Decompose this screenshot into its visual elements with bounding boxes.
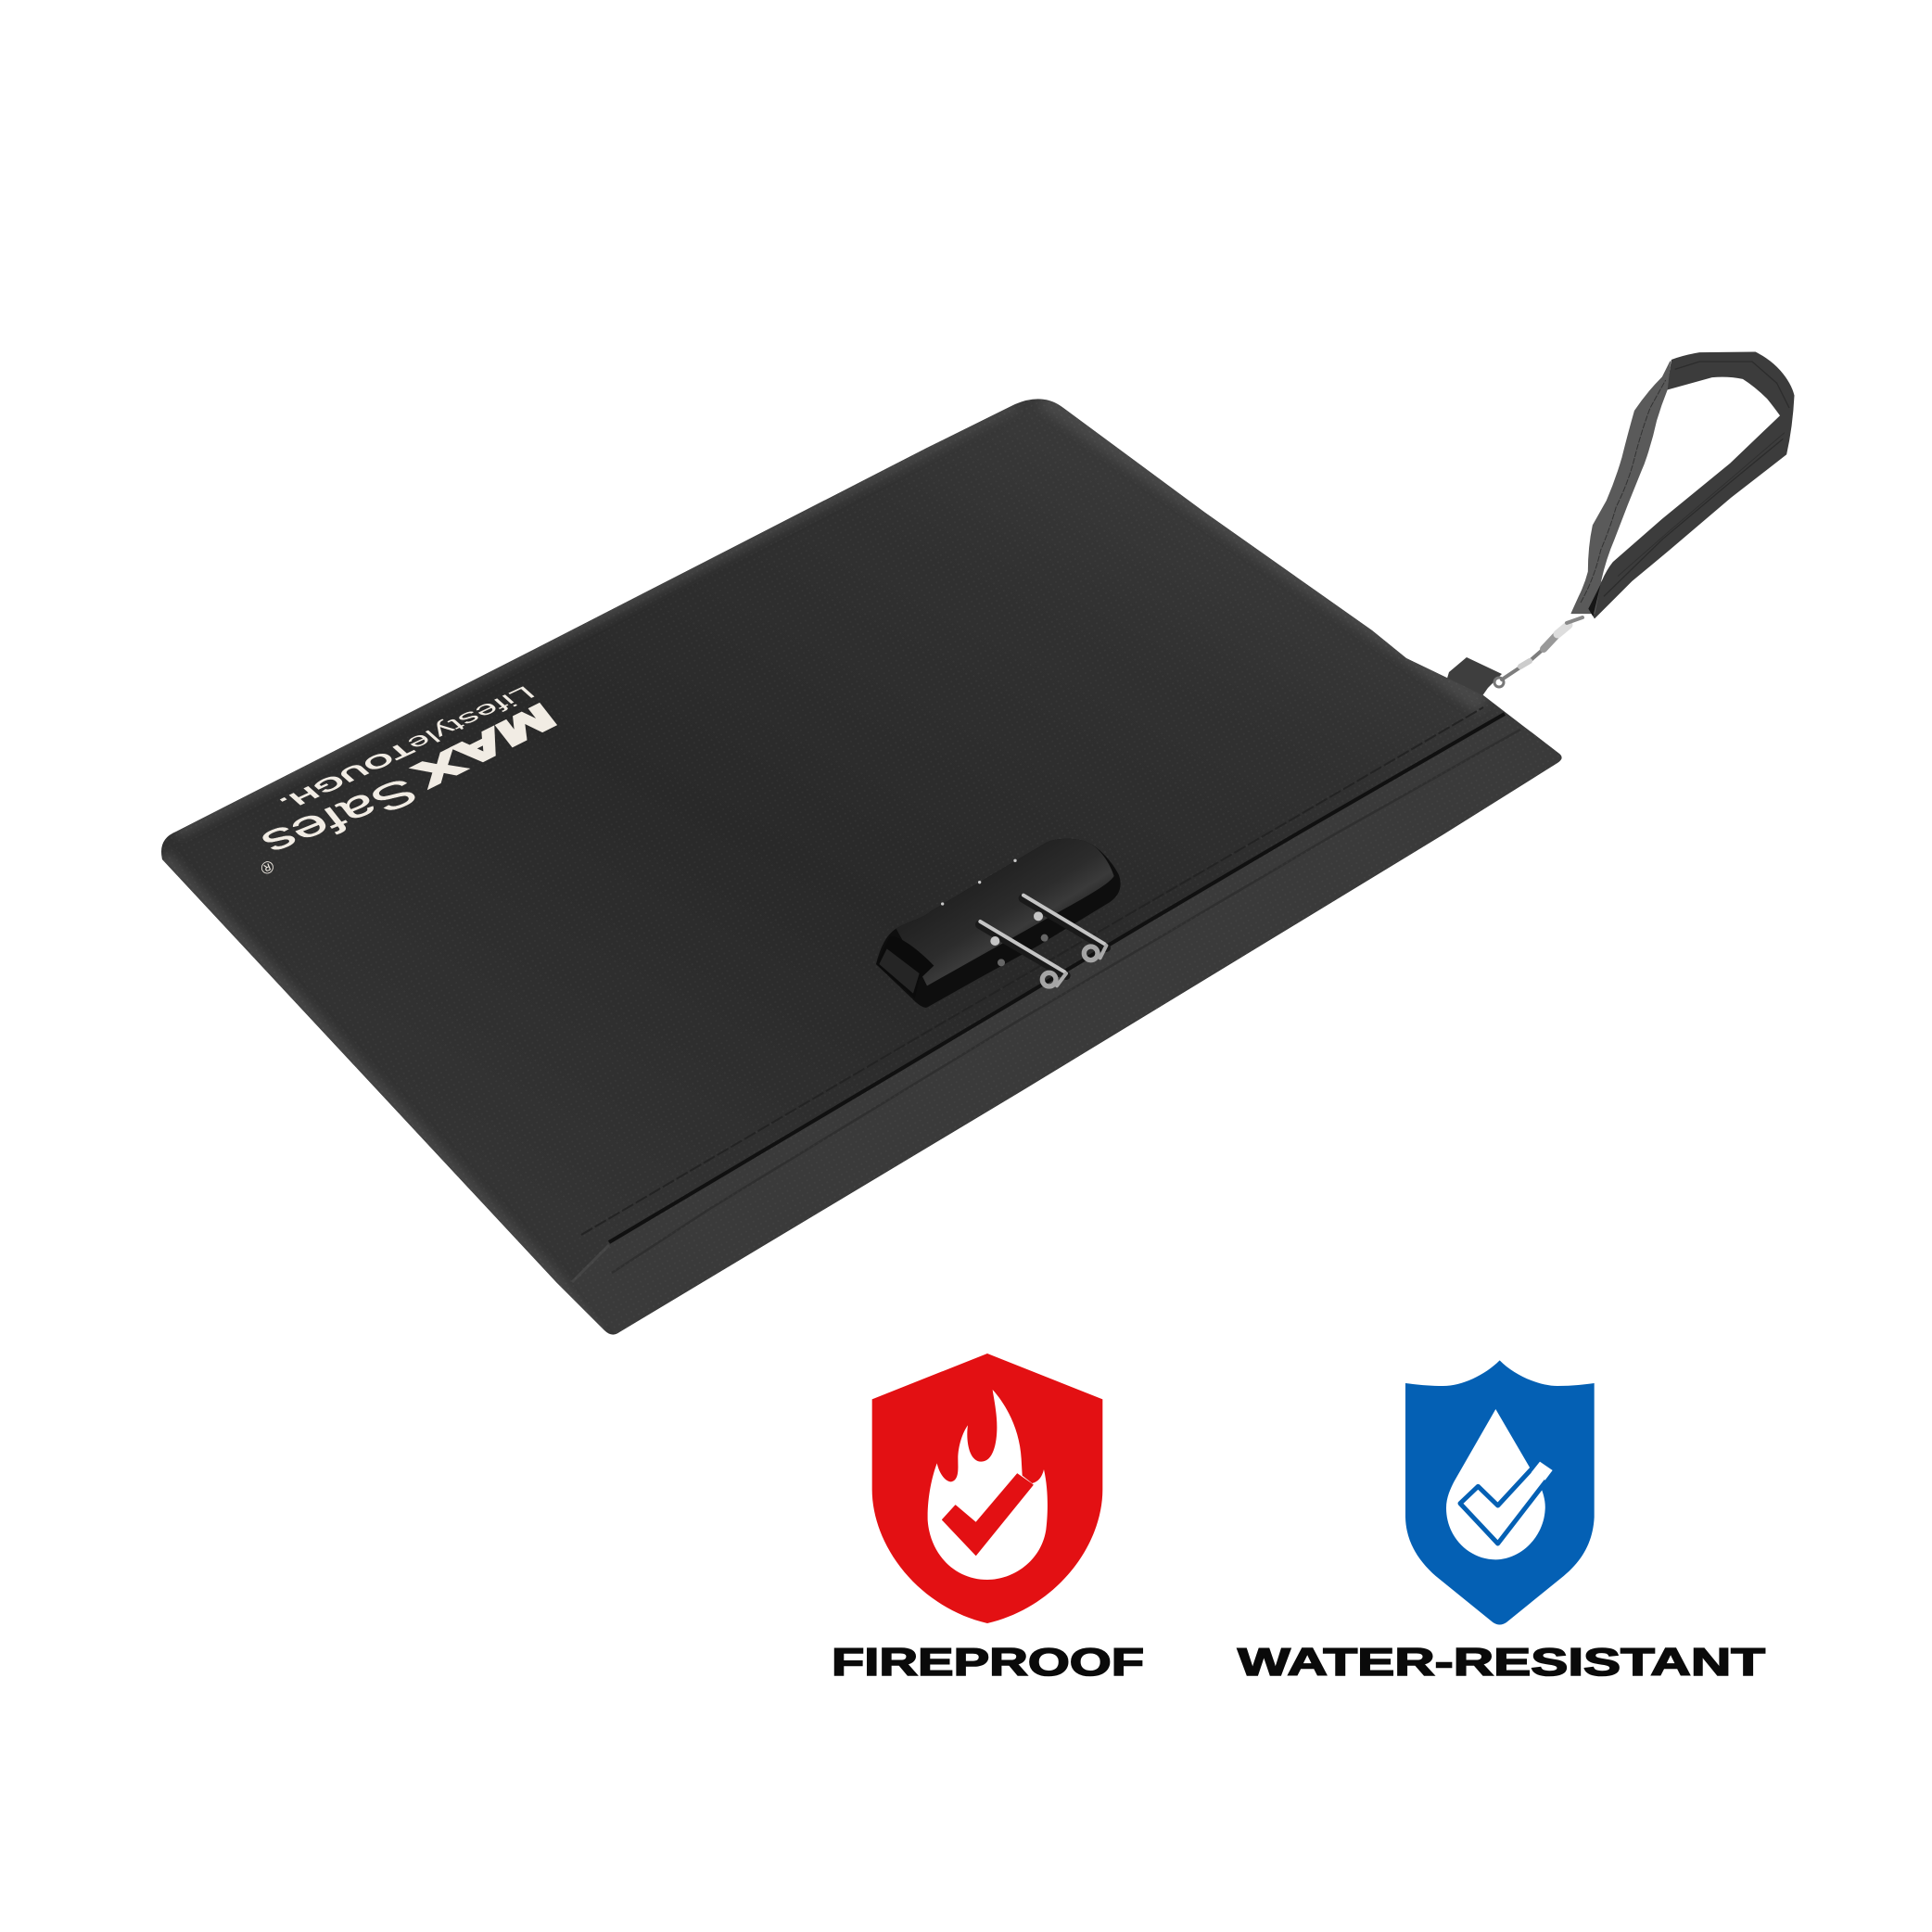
icon: combination lock (876, 839, 1121, 1008)
lock base (876, 839, 1121, 1008)
icon: water-resistant shield (1405, 1360, 1595, 1624)
flame (928, 1390, 1048, 1580)
texture (139, 371, 1585, 1354)
icon: zipper pull tab (1446, 657, 1502, 697)
label: water-resistant: WATER-RESISTANT (1238, 1640, 1765, 1684)
brand logo: LifestyleTOUGH. (273, 682, 540, 814)
brand logo: MAX (407, 696, 563, 794)
panel: document bag (139, 371, 1585, 1354)
bag body (161, 399, 1562, 1335)
label: fireproof: FIREPROOF (832, 1640, 1144, 1684)
water drop (1446, 1409, 1545, 1559)
strap: darker band (1588, 352, 1794, 618)
left shackle (980, 924, 1066, 975)
strap: lighter band (1571, 362, 1671, 614)
check mark (943, 1474, 1033, 1555)
right shackle (1023, 898, 1106, 947)
brand logo: ® (258, 856, 277, 880)
bottom zipper band (572, 714, 1567, 1340)
icon: fireproof shield (872, 1354, 1102, 1623)
lock end button (876, 936, 934, 998)
combination wheel dots (941, 859, 1017, 906)
zipper line (609, 714, 1505, 1242)
edge shading (162, 858, 603, 1335)
check mark (1460, 1460, 1555, 1544)
icon: metal swivel hook (1494, 617, 1582, 687)
icon: wrist strap (1571, 352, 1794, 618)
stitching (581, 707, 1483, 1235)
brand logo (253, 682, 563, 880)
brand logo: Safes (253, 770, 427, 865)
lock top face (896, 839, 1114, 985)
